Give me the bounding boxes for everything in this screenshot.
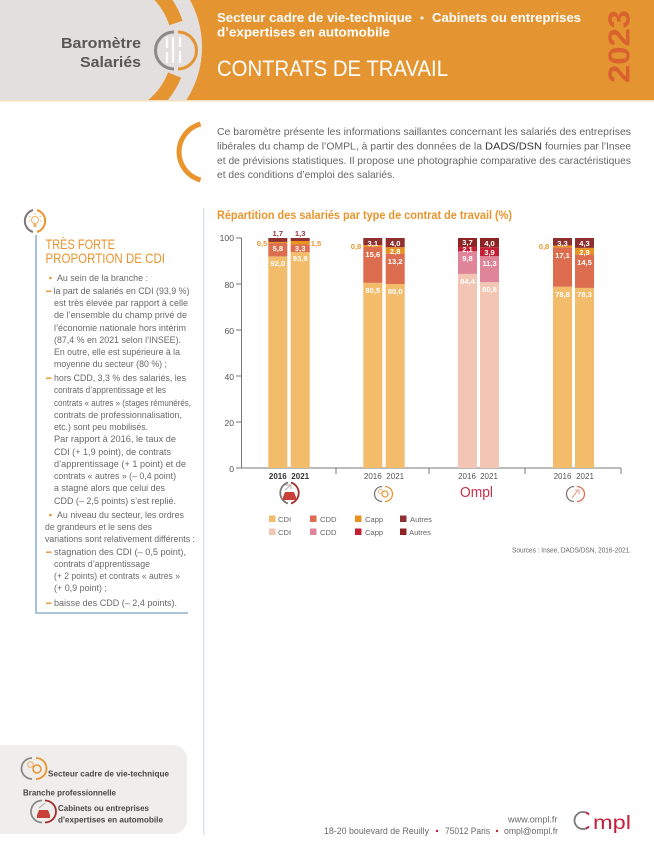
year labels: 2021 [576, 472, 594, 481]
bars: OMPL: 80,8 [482, 285, 497, 294]
panel body text [45, 273, 195, 609]
bars: OMPL: 9,8 [462, 254, 473, 263]
bars: Cabinets ou entreprises d'expertises en automobile: 5,8 [273, 244, 283, 253]
year labels: 2021 [291, 472, 310, 481]
panel body text: de grandeurs et le sens des [45, 522, 152, 533]
intro paragraph: et de prévisions statistiques. Il propose une photographie comparative des caractéristiques [217, 156, 631, 167]
panel body text: d’apprentissage (+ 1 point) et de [54, 459, 186, 470]
panel body text: de l’ensemble du champ privé de [54, 310, 187, 321]
logo: Ompl in chart: Ompl [460, 484, 493, 501]
header subtitle [217, 10, 581, 40]
legend: Capp [365, 515, 383, 524]
bars: Cabinets ou entreprises d'expertises en automobile: 0,5 [257, 239, 268, 248]
bars: all liberal branches sector: 78,3 [577, 290, 592, 299]
branch name: Cabinets ou entreprises [58, 803, 149, 813]
header subtitle: Cabinets ou entreprises [432, 10, 581, 25]
panel body text: moyenne du secteur (80 %) ; [54, 359, 167, 370]
intro paragraph [217, 127, 631, 181]
panel body text: CDI (+ 1,9 point), de contrats [54, 447, 171, 458]
panel body text: En outre, elle est supérieure à la [54, 347, 181, 358]
footer contact: www.ompl.fr [507, 814, 558, 824]
legend: Autres [410, 515, 432, 524]
intro paragraph: DADS/DSN [485, 142, 542, 152]
icon: branch [31, 800, 56, 822]
stacked bar chart [220, 229, 621, 537]
panel: key takeaway [36, 235, 195, 613]
panel heading: PROPORTION DE CDI [46, 250, 165, 266]
x axis [236, 468, 621, 474]
chart source: Sources : Insee, DADS/DSN, 2016-2021. [512, 548, 631, 554]
bars: Cabinets ou entreprises d'expertises en automobile [257, 229, 322, 468]
bars: Secteur cadre de vie-technique: 15,6 [365, 250, 380, 259]
legend: Capp [365, 528, 383, 537]
year labels: 2016 [458, 472, 476, 481]
bars: Secteur cadre de vie-technique: 13,2 [388, 257, 403, 266]
bars: all liberal branches sector [539, 238, 594, 468]
bars: all liberal branches sector: 4,3 [579, 239, 590, 248]
icon: living environment sector [374, 486, 393, 502]
panel body text: (+ 2 points) et contrats « autres » [54, 571, 180, 582]
year labels: 2021 [480, 472, 498, 481]
intro bracket [179, 124, 200, 180]
bars: Cabinets ou entreprises d'expertises en automobile: 93,9 [293, 254, 308, 263]
panel body text: etc.) sont peu mobilisés. [54, 422, 148, 433]
footer logo: Ompl [574, 812, 631, 834]
year labels: 2016 [554, 472, 572, 481]
panel body text: (+ 0,9 point) ; [54, 583, 107, 594]
bars: Cabinets ou entreprises d'expertises en automobile: 1,5 [311, 239, 322, 248]
y axis: 40 [224, 372, 234, 382]
panel body text: stagnation des CDI (– 0,5 point), [54, 547, 186, 558]
legend: CDD [320, 515, 337, 524]
bars: Secteur cadre de vie-technique: 3,1 [368, 239, 379, 248]
bars: OMPL: 3,7 [462, 238, 473, 247]
branding: Baromètre Salariés [61, 35, 141, 71]
main title: CONTRATS DE TRAVAIL [217, 56, 448, 81]
panel body text: contrats « autres » (– 0,4 point) [54, 471, 176, 482]
panel body text: variations sont relativement différents : [45, 534, 195, 545]
year labels: 2021 [386, 472, 405, 481]
legend: CDD [320, 528, 337, 537]
panel body text: la part de salariés en CDI (93,9 %) [54, 286, 190, 297]
y axis: 60 [224, 326, 234, 336]
intro paragraph: Ce baromètre présente les informations saillantes concernant les salariés des entreprises [217, 127, 631, 138]
branding: Baromètre Salariés: Salariés [80, 54, 141, 71]
bars: Secteur cadre de vie-technique: 2,8 [390, 247, 400, 256]
bars: OMPL: 11,3 [482, 259, 497, 268]
branch label: Branche professionnelle [23, 788, 116, 798]
header subtitle: d’expertises en automobile [217, 24, 390, 40]
sector label: Secteur cadre de vie-technique [48, 768, 169, 778]
branch name: d'expertises en automobile [58, 814, 163, 824]
year labels [269, 472, 594, 481]
bars: all liberal branches sector: 2,9 [579, 248, 590, 257]
panel body text: Par rapport à 2016, le taux de [54, 434, 176, 445]
icon: sector [22, 758, 47, 779]
bars: all liberal branches sector: 78,8 [555, 290, 570, 299]
header subtitle: Secteur cadre de vie-technique [217, 10, 412, 25]
panel body text: l’économie nationale hors intérim [54, 323, 186, 334]
bars: Secteur cadre de vie-technique: 0,8 [351, 242, 361, 251]
legend: CDI [278, 515, 291, 524]
panel body text: a stagné alors que celui des [54, 483, 165, 494]
footer contact [324, 814, 558, 836]
panel body text: CDD (– 2,5 points) s’est replié. [54, 496, 176, 507]
panel body text: Au niveau du secteur, les ordres [57, 510, 184, 521]
bars: Secteur cadre de vie-technique: 4,0 [390, 239, 400, 248]
intro paragraph: fournies par l’Insee [545, 142, 631, 152]
bars: OMPL: 84,4 [460, 277, 476, 286]
panel: scope legend [0, 745, 187, 834]
icon: all branches [567, 486, 584, 502]
panel body text: est très élevée par rapport à celle [54, 298, 188, 309]
y axis: 100 [220, 233, 234, 243]
footer contact: 18-20 boulevard de Reuilly [324, 825, 429, 836]
legend: CDI [278, 528, 291, 537]
footer logo: Ompl: mpl [593, 813, 631, 834]
bars: all liberal branches sector: 3,3 [557, 239, 568, 248]
y axis: 0 [229, 464, 234, 474]
bars: OMPL: 2,1 [462, 245, 474, 254]
page header banner [0, 0, 654, 102]
branch name [58, 803, 163, 824]
intro paragraph: et des conditions d’emploi des salariés. [217, 170, 395, 181]
panel body text: contrats d’apprentissage [54, 559, 150, 570]
y axis: 80 [224, 280, 234, 290]
bars: all liberal branches sector: 0,8 [539, 242, 549, 251]
icon: light bulb [25, 210, 45, 232]
bars: OMPL [458, 238, 499, 468]
footer contact: 75012 Paris [445, 825, 490, 836]
year labels: 2016 [269, 472, 287, 481]
bars: all liberal branches sector: 17,1 [555, 251, 571, 260]
panel heading: TRÈS FORTE [46, 236, 115, 252]
panel body text: (87,4 % en 2021 selon l’INSEE). [54, 335, 181, 346]
bars: Cabinets ou entreprises d'expertises en automobile: 92,0 [270, 259, 285, 268]
bars: Secteur cadre de vie-technique [351, 238, 405, 468]
footer contact: ompl@ompl.fr [504, 825, 558, 836]
bars: all liberal branches sector: 14,5 [577, 258, 593, 267]
y axis: 20 [224, 418, 234, 428]
bars: OMPL: 4,0 [484, 239, 495, 248]
markers [46, 277, 52, 604]
panel body text: baisse des CDD (– 2,4 points). [54, 598, 177, 609]
intro paragraph: libérales du champ de l’OMPL, à partir des données de la [217, 142, 482, 152]
icon: automotive expertise [280, 482, 299, 504]
year: 2023 [602, 10, 636, 83]
panel body text: hors CDD, 3,3 % des salariés, les [54, 373, 186, 384]
year labels: 2016 [364, 472, 382, 481]
chart title: Répartition des salariés par type de contrat de travail (%) [217, 210, 512, 222]
branding: Baromètre Salariés: Baromètre [61, 35, 141, 52]
panel body text: Au sein de la branche : [57, 273, 148, 284]
bars: Cabinets ou entreprises d'expertises en automobile: 1,7 [273, 229, 283, 238]
bars: Secteur cadre de vie-technique: 80,0 [388, 287, 403, 296]
panel body text: contrats « autres » (stages rémunérés, [54, 398, 191, 409]
legend: Autres [409, 528, 431, 537]
icon: barometer [156, 32, 197, 69]
y axis [220, 233, 242, 474]
panel body text: contrats de professionnalisation, [54, 410, 182, 421]
panel heading [46, 236, 165, 266]
bars: Secteur cadre de vie-technique: 80,5 [365, 286, 381, 295]
legend [269, 515, 432, 537]
panel body text: contrats d’apprentissage et les [54, 385, 166, 396]
bars: Cabinets ou entreprises d'expertises en automobile: 3,3 [295, 244, 305, 253]
bars: OMPL: 3,9 [484, 248, 495, 257]
bars: Cabinets ou entreprises d'expertises en automobile: 1,3 [295, 229, 305, 238]
